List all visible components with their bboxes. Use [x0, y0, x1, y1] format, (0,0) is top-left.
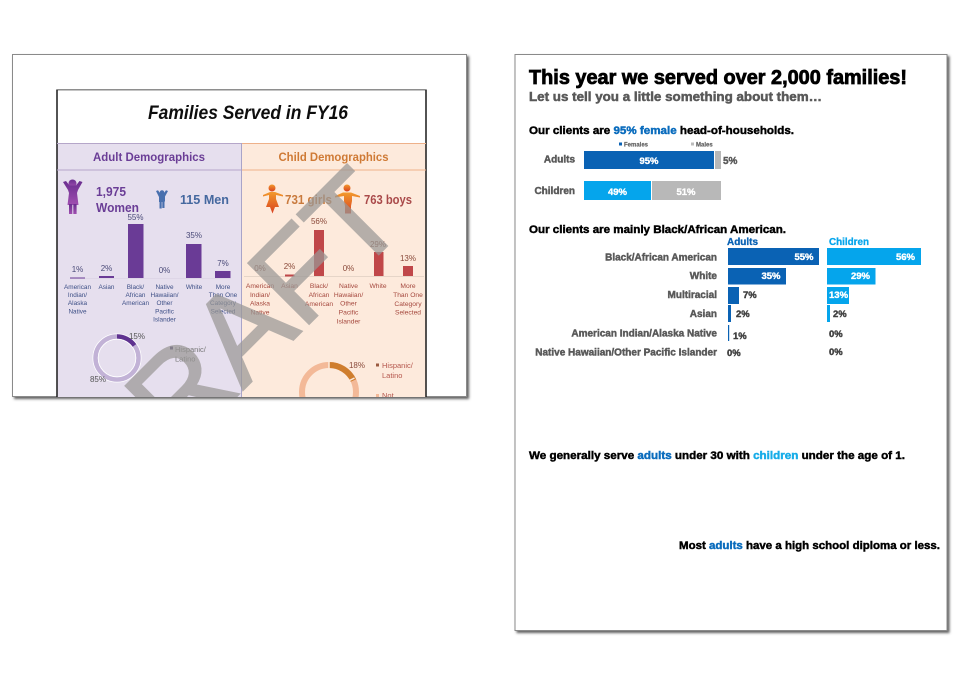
bar chart: adults by race: 7% [743, 290, 757, 301]
bar chart: child race: 0% [343, 264, 354, 273]
donut chart: child ethnicity: Latino [382, 371, 402, 380]
bar chart: child race: Than One [393, 292, 423, 299]
donut chart: adult ethnicity: Hispanic/ [175, 345, 207, 354]
bar chart: adults by race: 0% [727, 348, 741, 359]
bar chart: adult race: Black/ [127, 284, 144, 291]
chart: gender split: 51% [676, 187, 696, 198]
bar chart: children by race: 2% [833, 309, 847, 320]
donut chart: child ethnicity: Not [382, 391, 395, 400]
bar chart: adult race: Selected [211, 308, 236, 316]
bar chart: child race: African [309, 292, 330, 299]
subtitle: Let us tell you a little something about them… [529, 90, 822, 104]
bar chart: adult race: 7% [217, 259, 229, 268]
bar chart: adults by race: Adults [727, 237, 758, 248]
bar chart: adult race: Pacific [155, 308, 175, 316]
bar chart: adult race: 0% [159, 266, 170, 275]
chart: gender split: 49% [608, 187, 628, 198]
bar chart: adult race: 1% [72, 265, 83, 274]
panel: client summary page [515, 54, 947, 630]
chart: race row labels: Multiracial [668, 290, 717, 301]
bar chart: children by race: 56% [896, 252, 916, 263]
bar chart: children by race: Children [829, 237, 869, 248]
bar chart: child race: 13% [400, 254, 416, 263]
bar chart: child race: American [246, 283, 274, 290]
bar chart: adult race: Islander [153, 316, 177, 324]
bar chart: child race: More [400, 283, 416, 290]
legend: Females [624, 142, 649, 148]
bar chart: adult race: Hawaiian/ [150, 292, 179, 299]
donut chart: child ethnicity: Hispanic/ [382, 361, 414, 370]
bar chart: child race: Indian/ [250, 292, 270, 299]
donut chart: adult ethnicity: Latino [175, 354, 195, 364]
bar chart: adult race: American [64, 284, 91, 291]
bar chart: child race: 56% [311, 217, 327, 226]
bar chart: child race: 2% [284, 262, 295, 271]
bar chart: child race: Selected [395, 310, 421, 316]
bar chart: child race: Other [340, 300, 358, 308]
bar chart: adult race: More [216, 284, 231, 291]
heading: education: Most adults have a high school diploma or less. [679, 540, 940, 552]
heading: race: Our clients are mainly Black/African American. [529, 224, 786, 236]
bar chart: adult race: Other [157, 300, 173, 307]
bar chart: adult race: White [186, 284, 203, 291]
donut chart: child ethnicity [299, 362, 413, 397]
bar chart: adults by race [727, 237, 819, 359]
bar chart: child race: White [369, 283, 387, 290]
bar chart: child race: American [305, 301, 333, 308]
frame [57, 90, 426, 403]
heading: adult demographics: Adult Demographics [93, 150, 205, 164]
girls count: 731 girls [285, 193, 332, 207]
bar chart: adult race: 2% [101, 264, 112, 273]
bar chart: adult race: American [122, 300, 149, 307]
bar chart: adults by race: 2% [736, 309, 750, 320]
chart: race row labels: Black/African American [605, 252, 717, 264]
heading: age: We generally serve adults under 30 with children under the age of 1. [529, 450, 905, 462]
bar chart: child race [244, 217, 424, 326]
panel: adult demographics background [57, 143, 242, 403]
chart: gender split: 95% [639, 156, 659, 167]
bar chart: adult race: Native [68, 308, 87, 316]
icon: man [156, 190, 168, 208]
bar chart: adult race: African [126, 292, 146, 299]
chart: race row labels: Native Hawaiian/Other Pacific Islander [535, 348, 717, 358]
chart: gender split: Children [534, 186, 575, 197]
bar chart: child race: Native [251, 310, 270, 316]
bar chart: adult race: 55% [127, 213, 144, 222]
heading: gender: Our clients are 95% female head-of-households. [529, 125, 794, 137]
women label: Women [96, 201, 139, 215]
icon: boy [335, 184, 360, 214]
legend: Males [696, 142, 713, 148]
chart: race row labels: American Indian/Alaska Native [571, 328, 717, 340]
icon: woman [63, 180, 82, 214]
watermark: draft: DRAFT [36, 144, 429, 537]
panel: families served draft slide [12, 54, 471, 401]
bar chart: children by race: 0% [829, 347, 843, 358]
chart: race row labels: White [690, 271, 717, 282]
bar chart: adults by race: 55% [794, 252, 814, 263]
bar chart: adults by race: 1% [733, 331, 747, 342]
bar chart: child race: Pacific [339, 310, 359, 316]
bar chart: child race: Black/ [310, 283, 328, 290]
bar chart: adult race: Native [155, 284, 174, 291]
icon: girl [263, 184, 283, 214]
donut chart: adult ethnicity [90, 332, 207, 384]
heading: child demographics: Child Demographics [278, 150, 389, 164]
chart: race row labels: Asian [690, 309, 717, 320]
chart: race row labels [535, 252, 717, 358]
title: Families Served in FY16 [148, 103, 348, 124]
women count: 1,975 [96, 185, 126, 199]
bar chart: adult race: Alaska [68, 300, 88, 307]
bar chart: adult race: Category [210, 300, 237, 307]
bar chart: children by race: 13% [829, 290, 849, 301]
bar chart: child race: Hawaiian/ [334, 292, 363, 299]
bar chart: child race: Native [339, 283, 358, 290]
bar chart: child race: Category [394, 301, 422, 308]
donut chart: child ethnicity: 18% [349, 361, 365, 370]
bar chart: adult race: 35% [186, 231, 202, 240]
bar chart: adult race: Indian/ [68, 292, 87, 299]
bar chart: adults by race: 35% [761, 271, 781, 282]
chart: gender split: 5% [723, 156, 738, 167]
men count: 115 Men [180, 193, 229, 207]
bar chart: children by race [827, 237, 921, 358]
bar chart: adult race [64, 213, 238, 324]
donut chart: adult ethnicity: 85% [90, 375, 106, 384]
bar chart: child race: Alaska [250, 300, 270, 308]
bar chart: children by race: 0% [829, 329, 843, 340]
legend [619, 142, 713, 148]
bar chart: child race: 0% [254, 264, 266, 273]
panel: child demographics background [242, 143, 426, 403]
bar chart: child race: 29% [370, 240, 386, 249]
boys count: 763 boys [364, 193, 412, 207]
bar chart: adult race: Than One [209, 292, 238, 299]
title: This year we served over 2,000 families! [529, 66, 907, 89]
bar chart: child race: Islander [337, 318, 361, 326]
chart: gender split [534, 142, 738, 200]
bar chart: child race: Asian [281, 283, 298, 290]
chart: gender split: Adults [544, 154, 575, 166]
donut chart: adult ethnicity: 15% [129, 332, 145, 341]
bar chart: children by race: 29% [851, 271, 871, 282]
bar chart: adult race: Asian [98, 284, 115, 291]
